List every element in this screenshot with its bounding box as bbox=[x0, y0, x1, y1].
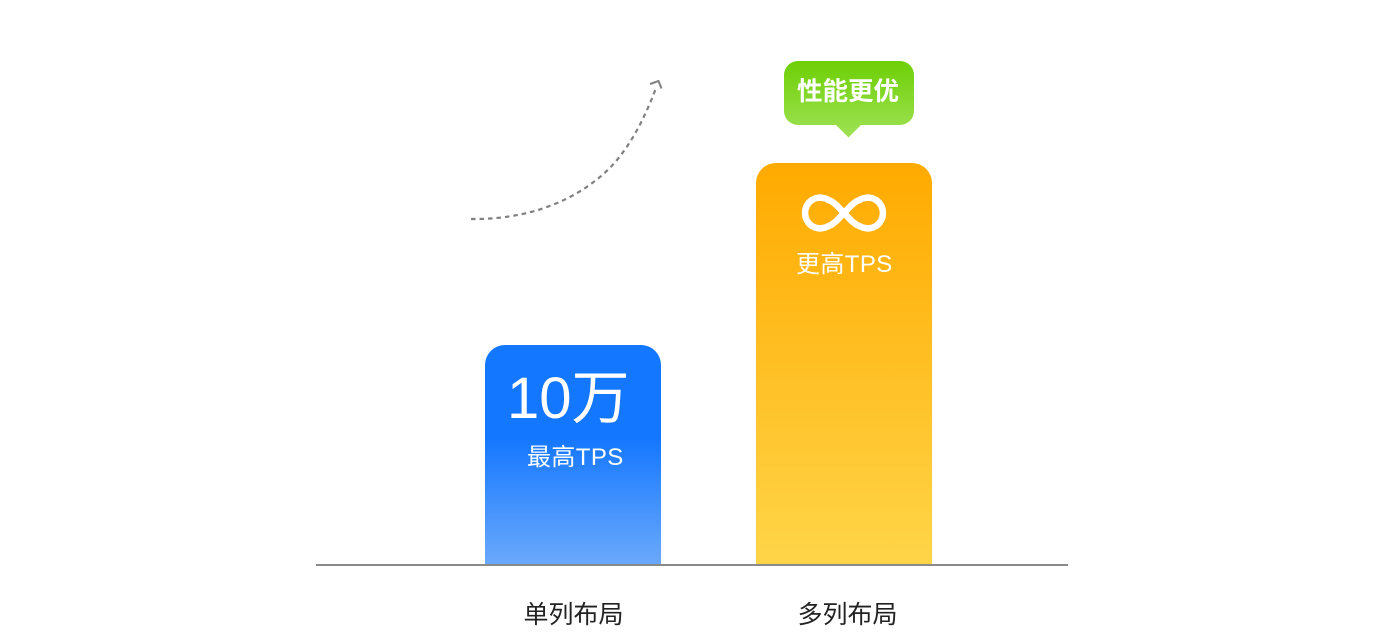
bar: multi-column layout bbox=[756, 163, 932, 565]
axis label: single-column layout: 单列布局 bbox=[523, 601, 624, 629]
value: 100k: 10万 bbox=[507, 366, 630, 431]
callout: better performance bbox=[784, 61, 914, 138]
baseline axis bbox=[316, 564, 1068, 566]
axis label: multi-column layout: 多列布局 bbox=[797, 601, 898, 629]
callout: better performance: 性能更优 bbox=[797, 78, 899, 106]
label: higher TPS: 更高TPS bbox=[796, 251, 893, 278]
icon: infinity bbox=[802, 194, 886, 232]
dashed growth arrow bbox=[471, 80, 662, 220]
bar: single-column layout bbox=[485, 345, 661, 565]
label: max TPS: 最高TPS bbox=[527, 444, 624, 471]
